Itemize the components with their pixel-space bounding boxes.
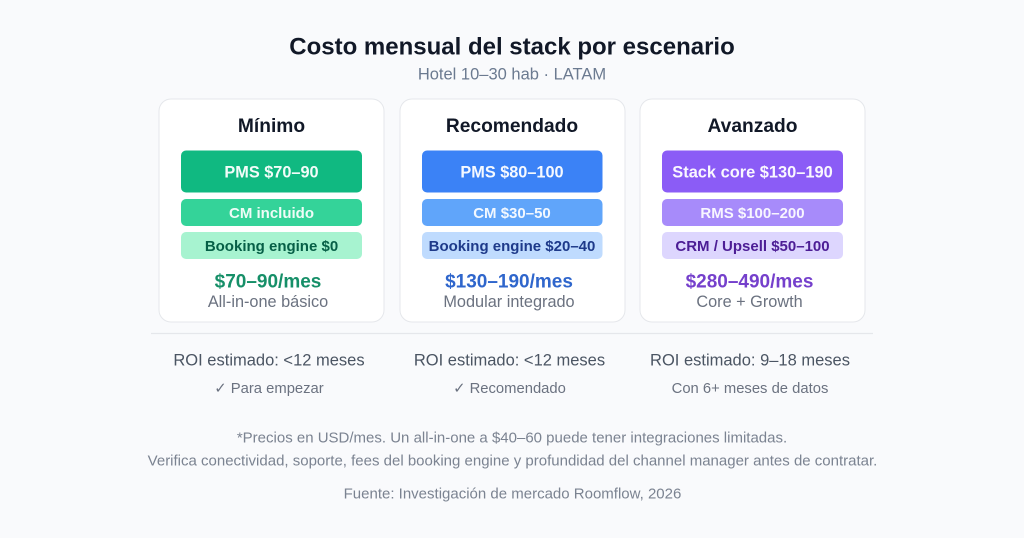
- block: RMS: [662, 199, 843, 226]
- block: CM: [422, 199, 602, 226]
- note: Recomendado: ✓ Recomendado: [453, 381, 566, 397]
- block: CRM / Upsell: [662, 232, 843, 259]
- source: Fuente: Investigación de mercado Roomflow, 2026: [344, 486, 681, 502]
- block: CM: [181, 199, 362, 226]
- panel: Recomendado: [400, 99, 625, 322]
- ROI: Avanzado: ROI estimado: 9–18 meses: [650, 352, 850, 370]
- block: CRM / Upsell: CRM / Upsell $50–100: [675, 238, 830, 255]
- heading: Mínimo: Mínimo: [238, 116, 305, 137]
- panel: Avanzado: [640, 99, 865, 322]
- block: Stack core: Stack core $130–190: [672, 164, 833, 182]
- block: Booking engine: Booking engine $0: [205, 238, 338, 255]
- note: Con datos: Con 6+ meses de datos: [672, 381, 828, 397]
- block: PMS: PMS $70–90: [224, 164, 319, 182]
- block: Booking engine: [181, 232, 362, 259]
- ROI: Recomendado: ROI estimado: <12 meses: [414, 352, 605, 370]
- heading: Avanzado: Avanzado: [708, 116, 797, 137]
- description: Modular integrado: [443, 293, 575, 311]
- block: Booking engine: Booking engine $20–40: [429, 238, 595, 255]
- block: Stack core: [662, 150, 843, 192]
- block: PMS: [181, 150, 362, 192]
- subtitle: Hotel 10–30 hab · LATAM: [418, 66, 606, 84]
- block: CM: CM incluido: [229, 205, 314, 222]
- block: PMS: PMS $80–100: [460, 164, 564, 182]
- block: RMS: RMS $100–200: [700, 205, 805, 222]
- panel: Mínimo: [159, 99, 384, 322]
- footnote: [148, 430, 877, 470]
- price total: $280–490/mes: [686, 272, 813, 292]
- footnote: Verifica conectividad, soporte, fees del booking engine y profundidad del channel manager antes de contratar.: [148, 452, 877, 470]
- description: Core + Growth: [696, 293, 803, 311]
- footnote: *Precios en USD/mes. Un all-in-one a $40–60 puede tener integraciones limitadas.: [237, 430, 787, 446]
- block: CM: CM $30–50: [473, 205, 551, 222]
- title: Costo mensual del stack por escenario: [289, 34, 735, 60]
- description: All-in-one básico: [208, 293, 328, 311]
- ROI: Mínimo: ROI estimado: <12 meses: [173, 352, 365, 370]
- block: Booking engine: [422, 232, 602, 259]
- price total: $130–190/mes: [445, 272, 573, 292]
- note: Para empezar: ✓ Para empezar: [214, 381, 324, 397]
- block: PMS: [422, 150, 602, 192]
- heading: Recomendado: Recomendado: [446, 116, 578, 137]
- price total: $70–90/mes: [215, 272, 321, 292]
